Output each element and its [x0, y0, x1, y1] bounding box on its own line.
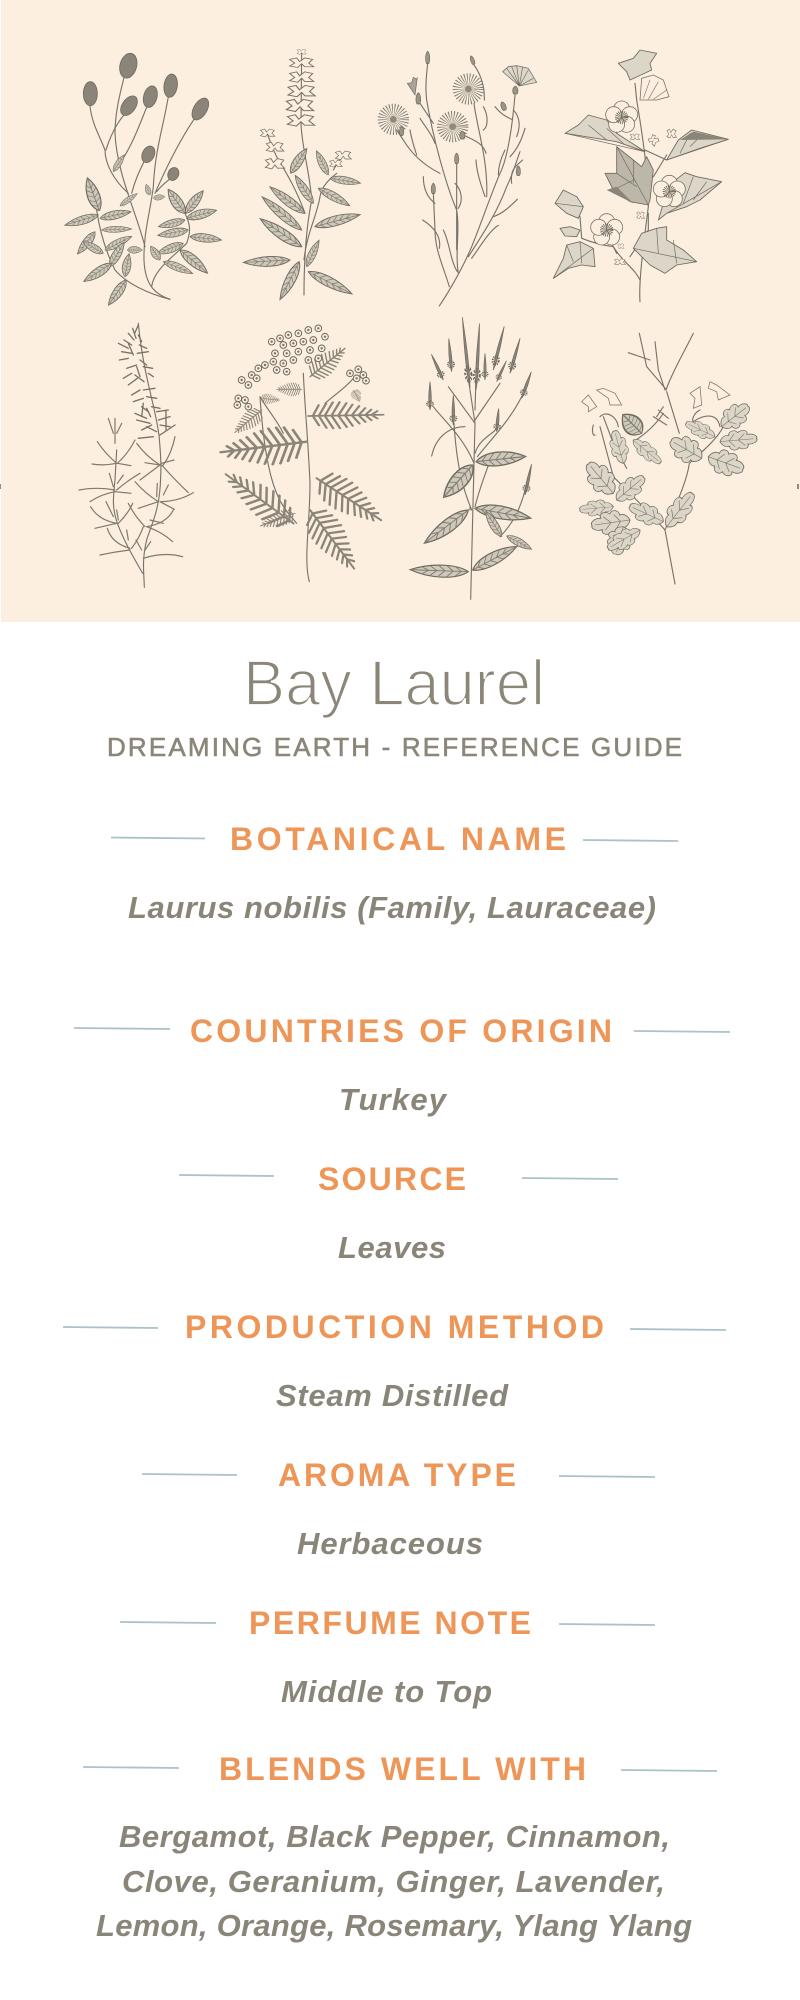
heading: blends well with: BLENDS WELL WITH [219, 1751, 586, 1787]
plant: cornflower [386, 51, 537, 306]
heading: countries of origin: COUNTRIES OF ORIGIN [190, 1013, 612, 1049]
section: production method [63, 1309, 726, 1413]
edge marks [0, 484, 798, 489]
heading: perfume note: PERFUME NOTE [249, 1605, 531, 1641]
section: countries of origin [74, 1013, 730, 1117]
plant: savory with narrow leaves [79, 323, 193, 587]
section: blends well with [83, 1751, 717, 1943]
value: blends well with [96, 1819, 692, 1943]
panel: botanical illustration background [1, 0, 800, 622]
plant: celandine with lobed leaves [579, 333, 758, 584]
value: source: Leaves [338, 1230, 446, 1265]
section: botanical name [111, 821, 678, 925]
section: source [179, 1161, 618, 1265]
value: countries of origin: Turkey [339, 1082, 448, 1117]
value: aroma type: Herbaceous [297, 1526, 483, 1561]
illustration: botanical plants [64, 49, 758, 599]
value: production method: Steam Distilled [276, 1378, 509, 1413]
section: aroma type [142, 1457, 655, 1561]
subtitle: DREAMING EARTH - REFERENCE GUIDE [107, 732, 682, 762]
value: botanical name: Laurus nobilis (Family, Lauraceae) [128, 890, 656, 925]
value: perfume note: Middle to Top [281, 1674, 492, 1709]
value: blends well with: Clove, Geranium, Ginger, Lavender, [122, 1864, 665, 1899]
plant: burnet with seed heads [64, 51, 222, 308]
value: blends well with: Bergamot, Black Pepper, Cinnamon, [119, 1819, 670, 1854]
plant: vervain with spikes [410, 317, 535, 599]
heading: source: SOURCE [318, 1161, 466, 1197]
value: blends well with: Lemon, Orange, Rosemary, Ylang Ylang [96, 1908, 692, 1943]
heading: production method: PRODUCTION METHOD [185, 1309, 604, 1345]
heading: aroma type: AROMA TYPE [278, 1457, 516, 1493]
plant: mallow with flowers [553, 50, 728, 302]
heading: botanical name: BOTANICAL NAME [230, 821, 566, 857]
section: perfume note [120, 1605, 655, 1709]
plant: sage with flower spike [243, 49, 361, 302]
plant: tansy with fern leaves [217, 325, 390, 582]
title: Bay Laurel [243, 647, 545, 719]
